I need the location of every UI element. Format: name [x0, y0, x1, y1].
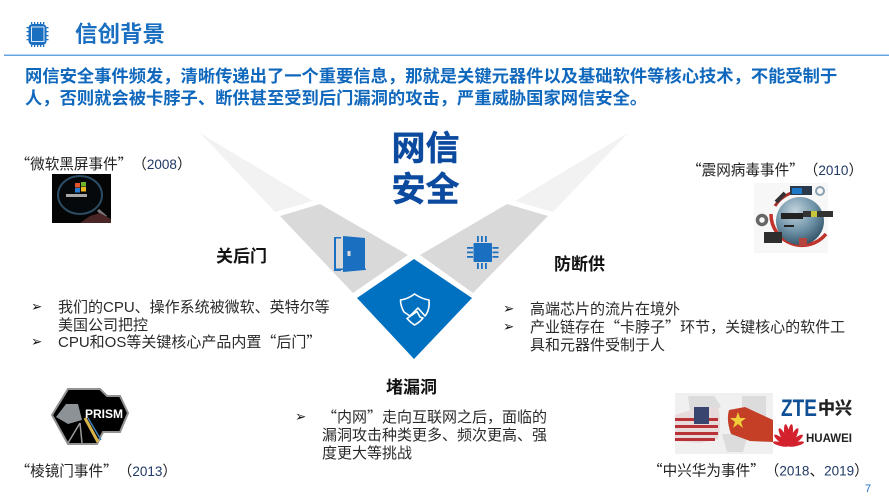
section heading: 堵漏洞: 堵漏洞: [386, 378, 437, 397]
icon: door: [334, 236, 366, 272]
logo: ZTE: [781, 395, 852, 422]
caption: 微软黑屏事件: “微软黑屏事件”（2008）: [16, 153, 192, 174]
header icon: chip: [26, 22, 48, 47]
bullets: 关后门: ➢: [31, 299, 43, 314]
bullets: 关后门: 我们的CPU、操作系统被微软、英特尔等: [58, 298, 330, 316]
bullets: 防断供: 具和元器件受制于人: [530, 337, 665, 354]
image: PRISM logo: PRISM: [85, 407, 123, 421]
image: Windows magnifier: [52, 174, 111, 223]
bullets: 防断供: ➢: [503, 319, 515, 334]
icon: chip: [467, 236, 498, 269]
bullets: 关后门: ➢: [31, 334, 43, 349]
bullets: 堵漏洞: “内网”走向互联网之后，面临的: [322, 406, 547, 427]
title: 信创背景: [75, 22, 165, 47]
section heading: 防断供: 防断供: [554, 254, 605, 274]
bullets: 防断供: 高端芯片的流片在境外: [530, 300, 680, 318]
header rule: [4, 54, 889, 56]
caption: 棱镜门事件: “棱镜门事件”（2013）: [16, 460, 177, 481]
intro text: 人，否则就会被卡脖子、断供甚至受到后门漏洞的攻击，严重威胁国家网信安全。: [25, 88, 647, 108]
heading: 网信安全: 网信: [392, 130, 460, 168]
bullets: 堵漏洞: 度更大等挑战: [322, 444, 412, 462]
logo: HUAWEI: [772, 424, 852, 448]
image: US and China fists: [675, 393, 773, 454]
central V diagram: [200, 133, 628, 359]
bullets: 堵漏洞: [295, 406, 547, 462]
bullets: 关后门: 美国公司把控: [58, 317, 148, 334]
page number: 7: [865, 483, 871, 495]
image: PRISM logo: [52, 389, 128, 444]
section heading: 关后门: 关后门: [216, 247, 267, 266]
bullets: 堵漏洞: 漏洞攻击种类更多、频次更高、强: [322, 427, 547, 444]
intro text: [25, 66, 837, 108]
logo: ZTE: ZTE: [781, 395, 817, 422]
caption: 震网病毒事件: “震网病毒事件”（2010）: [687, 159, 863, 180]
bullets: 防断供: ➢: [503, 301, 515, 316]
logo: HUAWEI: HUAWEI: [806, 433, 852, 445]
intro text: 网信安全事件频发，清晰传递出了一个重要信息，那就是关键元器件以及基础软件等核心技术，不能受制于: [25, 66, 837, 86]
image: Stuxnet globe: [754, 183, 833, 253]
icon: shield: [400, 294, 429, 325]
heading: 网信安全: [392, 130, 460, 209]
caption: 中兴华为事件: “中兴华为事件”（2018、2019）: [648, 460, 869, 480]
bullets: 防断供: [503, 300, 845, 354]
logo: ZTE: 中兴: [818, 399, 852, 418]
bullets: 关后门: CPU和OS等关键核心产品内置“后门”: [58, 331, 321, 352]
bullets: 关后门: [31, 298, 330, 352]
bullets: 防断供: 产业链存在“卡脖子”环节，关键核心的软件工: [530, 316, 845, 337]
bullets: 堵漏洞: ➢: [295, 409, 307, 424]
heading: 网信安全: 安全: [392, 171, 460, 209]
